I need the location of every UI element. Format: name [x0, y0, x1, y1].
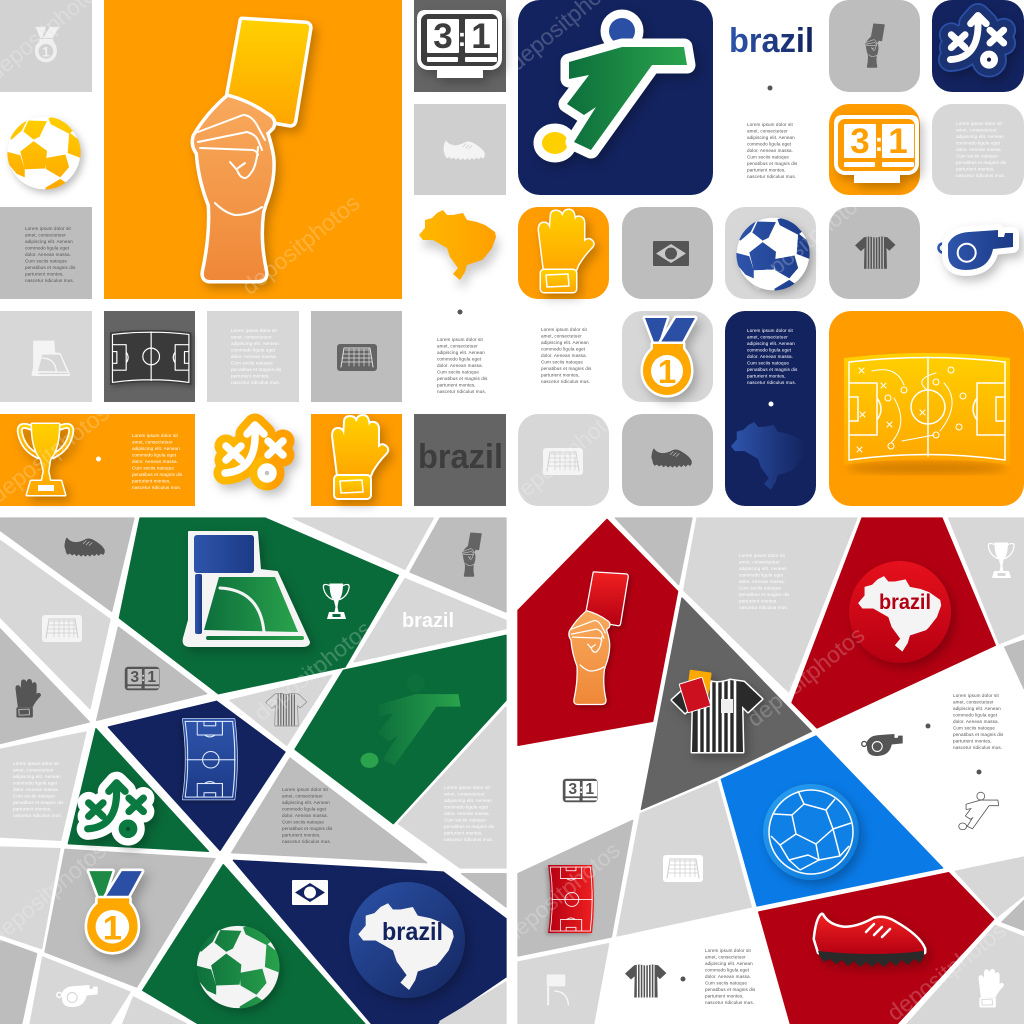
text block: adipiscing elit. Aenean	[541, 340, 589, 345]
text block: adipiscing elit. Aenean	[747, 341, 795, 346]
mosaic tiles	[0, 518, 506, 1024]
icon: trophy	[988, 542, 1014, 578]
text block: dolor. Aenean massa.	[231, 354, 277, 359]
text block: Lorem ipsum dolor sit	[739, 553, 785, 558]
text block: penatibus et magnis dis	[25, 265, 76, 270]
text block: dolor. Aenean massa.	[444, 811, 490, 816]
icon: Brazil map orange	[419, 210, 496, 280]
text block: adipiscing elit. Aenean	[956, 134, 1004, 139]
text block: nascetur ridiculus mus.	[437, 389, 486, 394]
label: brazil: brazil	[729, 22, 814, 60]
text block: penatibus et magnis dis	[747, 161, 798, 166]
icon: shirt	[855, 235, 896, 270]
text block: parturient montes,	[444, 830, 483, 836]
panel: red mosaic	[518, 518, 1024, 1024]
text block: dolor. Aenean massa.	[437, 363, 483, 368]
icon: medal: 1	[658, 353, 676, 390]
text block: nascetur ridiculus mus.	[705, 1000, 754, 1005]
icon: scoreboard: 1	[471, 17, 491, 56]
icon: medal	[35, 27, 59, 62]
tile: tactic navy	[932, 0, 1024, 92]
text block: Lorem ipsum dolor sit	[132, 433, 178, 438]
text block: adipiscing elit. Aenean	[282, 800, 330, 805]
text block: adipiscing elit. Aenean	[705, 961, 753, 966]
icon: scoreboard: :	[875, 127, 883, 157]
icon: medal: 1	[42, 44, 50, 59]
text block: nascetur ridiculus mus.	[25, 278, 74, 283]
tile: player navy	[518, 0, 713, 195]
icon: medal: 1	[103, 909, 122, 947]
icon: scoreboard: 3	[130, 669, 139, 686]
tile: shirt	[829, 207, 920, 299]
icon: glove	[539, 210, 593, 292]
icon: shoe	[651, 448, 692, 468]
text block: Cum sociis natoque	[132, 466, 174, 470]
text block: Cum sociis natoque	[747, 360, 789, 366]
text block: dolor. Aenean massa.	[132, 459, 178, 464]
text block: adipiscing elit. Aenean	[437, 350, 485, 355]
text block: dolor. Aenean massa.	[956, 147, 1002, 152]
tile: glove orange	[518, 207, 609, 299]
tile: tactical pitch orange	[829, 311, 1024, 506]
text block: Lorem ipsum dolor sit	[705, 948, 751, 953]
text block: amet, consectetuer	[13, 768, 54, 772]
text block: penatibus et magnis dis	[231, 367, 282, 372]
text block: Lorem ipsum dolor sit	[444, 785, 490, 790]
icon: Brazil map blue	[731, 422, 806, 490]
icon: goal	[42, 615, 82, 642]
icon: whistle	[862, 734, 903, 756]
icon: shirt	[266, 692, 306, 727]
icon: whistle	[57, 985, 98, 1007]
dot marker	[926, 724, 930, 728]
text block: Cum sociis natoque	[25, 258, 67, 264]
text block: commodo ligula eget	[747, 142, 792, 146]
watermarks: depositphotos	[237, 190, 364, 300]
tile: goal	[311, 311, 402, 402]
text block: amet, consectetuer	[705, 954, 746, 960]
icon: whistle	[938, 230, 1013, 270]
text block: parturient montes,	[953, 738, 992, 744]
label: brazil: brazil	[402, 609, 454, 632]
label: brazil: brazil	[418, 438, 503, 476]
icon: scoreboard: 1	[147, 669, 156, 686]
icon: flag	[653, 241, 689, 266]
icon: goal	[337, 344, 377, 371]
text block: parturient montes,	[541, 372, 580, 378]
text block: parturient montes,	[231, 374, 270, 378]
text block: dolor. Aenean massa.	[953, 719, 999, 724]
icon: tactic	[225, 425, 283, 479]
text block: nascetur ridiculus mus.	[444, 837, 493, 842]
label: brazil: brazil	[879, 590, 931, 614]
text block: adipiscing elit. Aenean	[953, 706, 1001, 711]
icon: blue ball	[763, 784, 859, 880]
icon: flag	[292, 880, 328, 905]
tile: glove	[311, 414, 402, 506]
icon: player	[542, 18, 687, 154]
text block: parturient montes,	[747, 168, 786, 172]
tile: medal	[622, 311, 713, 402]
text block: commodo ligula eget	[25, 246, 70, 250]
text block: adipiscing elit. Aenean	[739, 566, 787, 571]
text block: dolor. Aenean massa.	[705, 974, 751, 979]
icon: orange ball	[6, 115, 82, 191]
text block: penatibus et magnis dis	[132, 472, 183, 477]
text block: adipiscing elit. Aenean	[444, 798, 492, 803]
icon: scoreboard	[123, 665, 161, 696]
mosaic tiles	[518, 518, 1024, 1024]
icon: corner flag	[31, 341, 70, 376]
text block: commodo ligula eget	[705, 968, 750, 972]
text block: Cum sociis natoque	[953, 726, 995, 730]
icon: player outline	[959, 793, 998, 829]
text block: commodo ligula eget	[739, 572, 784, 578]
icon: player	[361, 674, 461, 768]
dot marker	[768, 86, 772, 90]
text block: commodo ligula eget	[132, 452, 177, 458]
text block: commodo ligula eget	[231, 348, 276, 352]
icon: blue ball	[735, 216, 811, 292]
tile: goal	[518, 414, 609, 506]
watermarks: depositphotos	[882, 917, 1011, 1024]
text block: nascetur ridiculus mus.	[739, 605, 788, 610]
watermarks: depositphotos	[249, 616, 376, 726]
icon: glove	[333, 416, 387, 498]
map	[358, 903, 454, 990]
text block: Cum sociis natoque	[739, 586, 781, 590]
text block: penatibus et magnis dis	[705, 987, 756, 992]
text block: parturient montes,	[956, 166, 995, 172]
icon: corner flag	[184, 532, 309, 646]
dot marker	[96, 456, 101, 462]
icon: shirt	[625, 963, 666, 998]
icon: goal	[543, 448, 583, 475]
text block: commodo ligula eget	[541, 346, 586, 352]
text block: amet, consectetuer	[444, 792, 485, 796]
text block: penatibus et magnis dis	[444, 824, 495, 829]
text block: penatibus et magnis dis	[282, 826, 333, 831]
text block: Cum sociis natoque	[705, 980, 747, 986]
circle	[849, 561, 951, 663]
text block: amet, consectetuer	[282, 794, 323, 798]
tile: pitch dark	[104, 311, 195, 402]
icon: medal	[643, 318, 695, 395]
text block: parturient montes,	[747, 374, 786, 378]
panel: orange square grid	[0, 0, 506, 506]
text block: Cum sociis natoque	[231, 360, 273, 366]
text block: commodo ligula eget	[13, 780, 58, 786]
tile: text light	[932, 104, 1024, 195]
text block: amet, consectetuer	[956, 128, 997, 132]
text block: Lorem ipsum dolor sit	[231, 328, 277, 333]
tile: brazil dark	[414, 414, 506, 506]
text block: adipiscing elit. Aenean	[231, 341, 279, 346]
text block: dolor. Aenean massa.	[747, 148, 793, 153]
icon: hand	[865, 24, 885, 68]
icon: red shoe	[815, 915, 924, 967]
icon: scoreboard: :	[579, 783, 583, 796]
icon: trophy	[323, 584, 349, 619]
badge: Brazil circle blue	[349, 882, 465, 998]
text block: penatibus et magnis dis	[739, 592, 790, 597]
dot marker	[768, 402, 774, 406]
text block: nascetur ridiculus mus.	[282, 839, 331, 844]
icon: scoreboard: 1	[585, 781, 594, 798]
watermarks: depositphotos	[744, 186, 871, 296]
text block: penatibus et magnis dis	[956, 160, 1007, 165]
text block: amet, consectetuer	[953, 700, 994, 704]
text block: amet, consectetuer	[132, 440, 173, 444]
text block: nascetur ridiculus mus.	[747, 380, 796, 385]
icon: scoreboard: 3	[568, 781, 577, 798]
text block: commodo ligula eget	[282, 806, 327, 812]
circle	[349, 882, 465, 998]
text block: amet, consectetuer	[437, 344, 478, 348]
text block: nascetur ridiculus mus.	[953, 745, 1002, 750]
icon: scoreboard: :	[458, 22, 466, 52]
text block: adipiscing elit. Aenean	[13, 774, 61, 779]
label: brazil: brazil	[382, 918, 443, 946]
text block: Lorem ipsum dolor sit	[25, 226, 71, 231]
text block: nascetur ridiculus mus.	[747, 174, 796, 179]
watermarks: depositphotos	[504, 398, 630, 510]
text block: parturient montes,	[282, 832, 321, 838]
text block: dolor. Aenean massa.	[739, 579, 785, 584]
icon: scoreboard: 3	[433, 17, 453, 56]
icon: hand	[462, 533, 482, 577]
tile: navy text and map	[725, 311, 816, 506]
icon: hand with yellow card	[194, 20, 309, 280]
text block: amet, consectetuer	[739, 560, 780, 564]
text block: Cum sociis natoque	[282, 820, 324, 824]
text block: adipiscing elit. Aenean	[132, 446, 180, 451]
text block: parturient montes,	[739, 598, 778, 604]
panel: green mosaic	[0, 518, 506, 1024]
tile: ball	[725, 207, 816, 299]
text block: parturient montes,	[705, 994, 744, 998]
icon: tactical pitch	[844, 353, 1010, 465]
icon: goal	[663, 855, 703, 882]
icon: green ball	[195, 924, 282, 1011]
text block: dolor. Aenean massa.	[747, 354, 793, 359]
text block: Cum sociis natoque	[541, 360, 583, 364]
icon: scoreboard	[561, 777, 599, 808]
icon: glove	[15, 679, 41, 718]
text block: Cum sociis natoque	[747, 154, 789, 160]
icon: tactic	[88, 783, 143, 835]
tile: big orange	[104, 0, 402, 299]
text block: nascetur ridiculus mus.	[956, 173, 1005, 178]
icon: scoreboard: 3	[850, 122, 870, 161]
dot marker	[458, 310, 462, 314]
text block: Cum sociis natoque	[437, 370, 479, 374]
text block: penatibus et magnis dis	[953, 732, 1004, 737]
icon: hand with red card	[570, 573, 628, 704]
icon: tactic	[950, 15, 1004, 65]
text block: Lorem ipsum dolor sit	[541, 327, 587, 332]
icon: shoe	[443, 140, 485, 160]
icon: scoreboard: 1	[888, 122, 908, 161]
icon: scoreboard: :	[141, 671, 145, 684]
text block: Cum sociis natoque	[13, 794, 55, 798]
text block: parturient montes,	[132, 478, 171, 484]
tile: medal	[0, 0, 92, 92]
text block: commodo ligula eget	[437, 356, 482, 362]
text block: Lorem ipsum dolor sit	[747, 328, 793, 333]
dot marker	[680, 976, 686, 982]
tile: shoe	[622, 414, 713, 506]
tile: corner flag	[0, 311, 92, 402]
icon: medal	[87, 871, 142, 952]
text block: penatibus et magnis dis	[437, 376, 488, 381]
text block: parturient montes,	[437, 382, 476, 388]
icon: shoe	[64, 537, 105, 557]
text block: dolor. Aenean massa.	[541, 353, 587, 358]
text block: nascetur ridiculus mus.	[541, 379, 590, 384]
tile: text grey	[0, 207, 92, 299]
text block: Cum sociis natoque	[956, 154, 998, 158]
tile: hand grey	[829, 0, 920, 92]
shadow under pitch	[847, 462, 1007, 474]
text block: penatibus et magnis dis	[13, 800, 64, 805]
text block: adipiscing elit. Aenean	[25, 239, 73, 244]
icon: trophy	[20, 424, 71, 495]
text block: dolor. Aenean massa.	[13, 787, 59, 792]
watermarks: depositphotos	[742, 622, 869, 732]
text block: Lorem ipsum dolor sit	[13, 761, 59, 766]
text block: penatibus et magnis dis	[747, 367, 798, 372]
tile: orange trophy and text	[0, 414, 195, 506]
text block: nascetur ridiculus mus.	[13, 813, 62, 818]
icon: glove	[978, 969, 1004, 1008]
panel: rounded square grid	[518, 0, 1024, 506]
text block: Lorem ipsum dolor sit	[282, 787, 328, 792]
tile: scoreboard orange	[829, 104, 920, 195]
icon: scoreboard	[417, 10, 502, 78]
text block: amet, consectetuer	[747, 334, 788, 340]
map	[858, 576, 941, 652]
icon: pitch	[110, 330, 191, 385]
text block: amet, consectetuer	[747, 128, 788, 134]
text block: dolor. Aenean massa.	[282, 813, 328, 818]
icon: vertical pitch red	[548, 865, 594, 933]
text block: nascetur ridiculus mus.	[132, 485, 181, 490]
tile: flag	[622, 207, 713, 299]
text block: Lorem ipsum dolor sit	[953, 693, 999, 698]
text block: commodo ligula eget	[956, 140, 1001, 146]
text block: commodo ligula eget	[444, 804, 489, 810]
text block: nascetur ridiculus mus.	[231, 380, 280, 385]
watermarks: depositphotos	[499, 837, 625, 949]
dot marker	[976, 770, 982, 774]
text block: penatibus et magnis dis	[541, 366, 592, 371]
text block: commodo ligula eget	[747, 348, 792, 352]
icon: corner flag	[543, 974, 582, 1009]
icon: vertical pitch navy	[183, 719, 237, 800]
text block: parturient montes,	[13, 806, 52, 812]
icon: referee shirt with cards	[672, 670, 762, 754]
tile: scoreboard dark	[414, 0, 506, 92]
text block: parturient montes,	[25, 272, 64, 276]
text block: dolor. Aenean massa.	[25, 252, 71, 257]
badge: Brazil circle red	[849, 561, 951, 663]
text block: Lorem ipsum dolor sit	[956, 121, 1002, 126]
text block: commodo ligula eget	[953, 712, 998, 718]
icon: scoreboard	[834, 115, 919, 183]
text block: Lorem ipsum dolor sit	[437, 337, 483, 342]
tile: text light	[207, 311, 299, 402]
text block: amet, consectetuer	[541, 334, 582, 338]
text block: Lorem ipsum dolor sit	[747, 122, 793, 127]
text block: amet, consectetuer	[25, 232, 66, 238]
text block: Cum sociis natoque	[444, 818, 486, 822]
text block: amet, consectetuer	[231, 334, 272, 340]
tile: shoe	[414, 104, 506, 195]
text block: adipiscing elit. Aenean	[747, 135, 795, 140]
